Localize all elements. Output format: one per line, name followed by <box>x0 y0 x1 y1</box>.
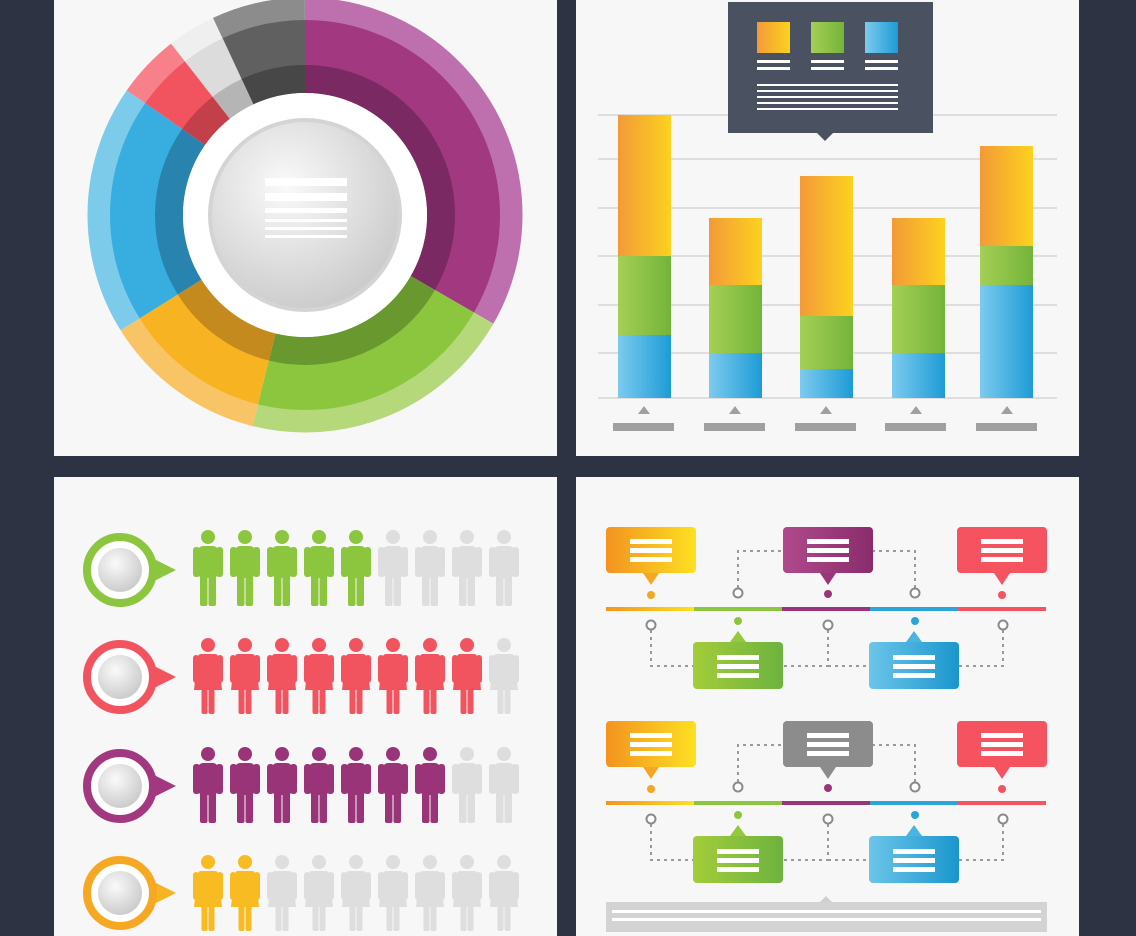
bar labels <box>613 406 1037 431</box>
donut ring <box>99 9 511 421</box>
panel: donut chart <box>54 0 557 456</box>
bar 5 <box>980 146 1033 398</box>
timeline 1 <box>606 527 1047 689</box>
panel: flowchart timelines <box>576 477 1079 936</box>
footer text bar <box>606 896 1047 932</box>
bar 3 <box>800 176 853 398</box>
bar 2 <box>709 218 762 398</box>
panel: bar chart <box>576 0 1079 456</box>
bar 1 <box>618 115 671 398</box>
row 1: green men <box>87 530 519 606</box>
row 3: purple men <box>87 747 519 823</box>
donut center disc <box>183 93 427 337</box>
panel: people pictograms <box>54 477 557 936</box>
callout: legend tooltip <box>728 2 933 141</box>
bar 4 <box>892 218 945 398</box>
timeline 2 <box>606 721 1047 883</box>
row 4: yellow women <box>87 855 519 931</box>
row 2: pink women <box>87 638 519 714</box>
